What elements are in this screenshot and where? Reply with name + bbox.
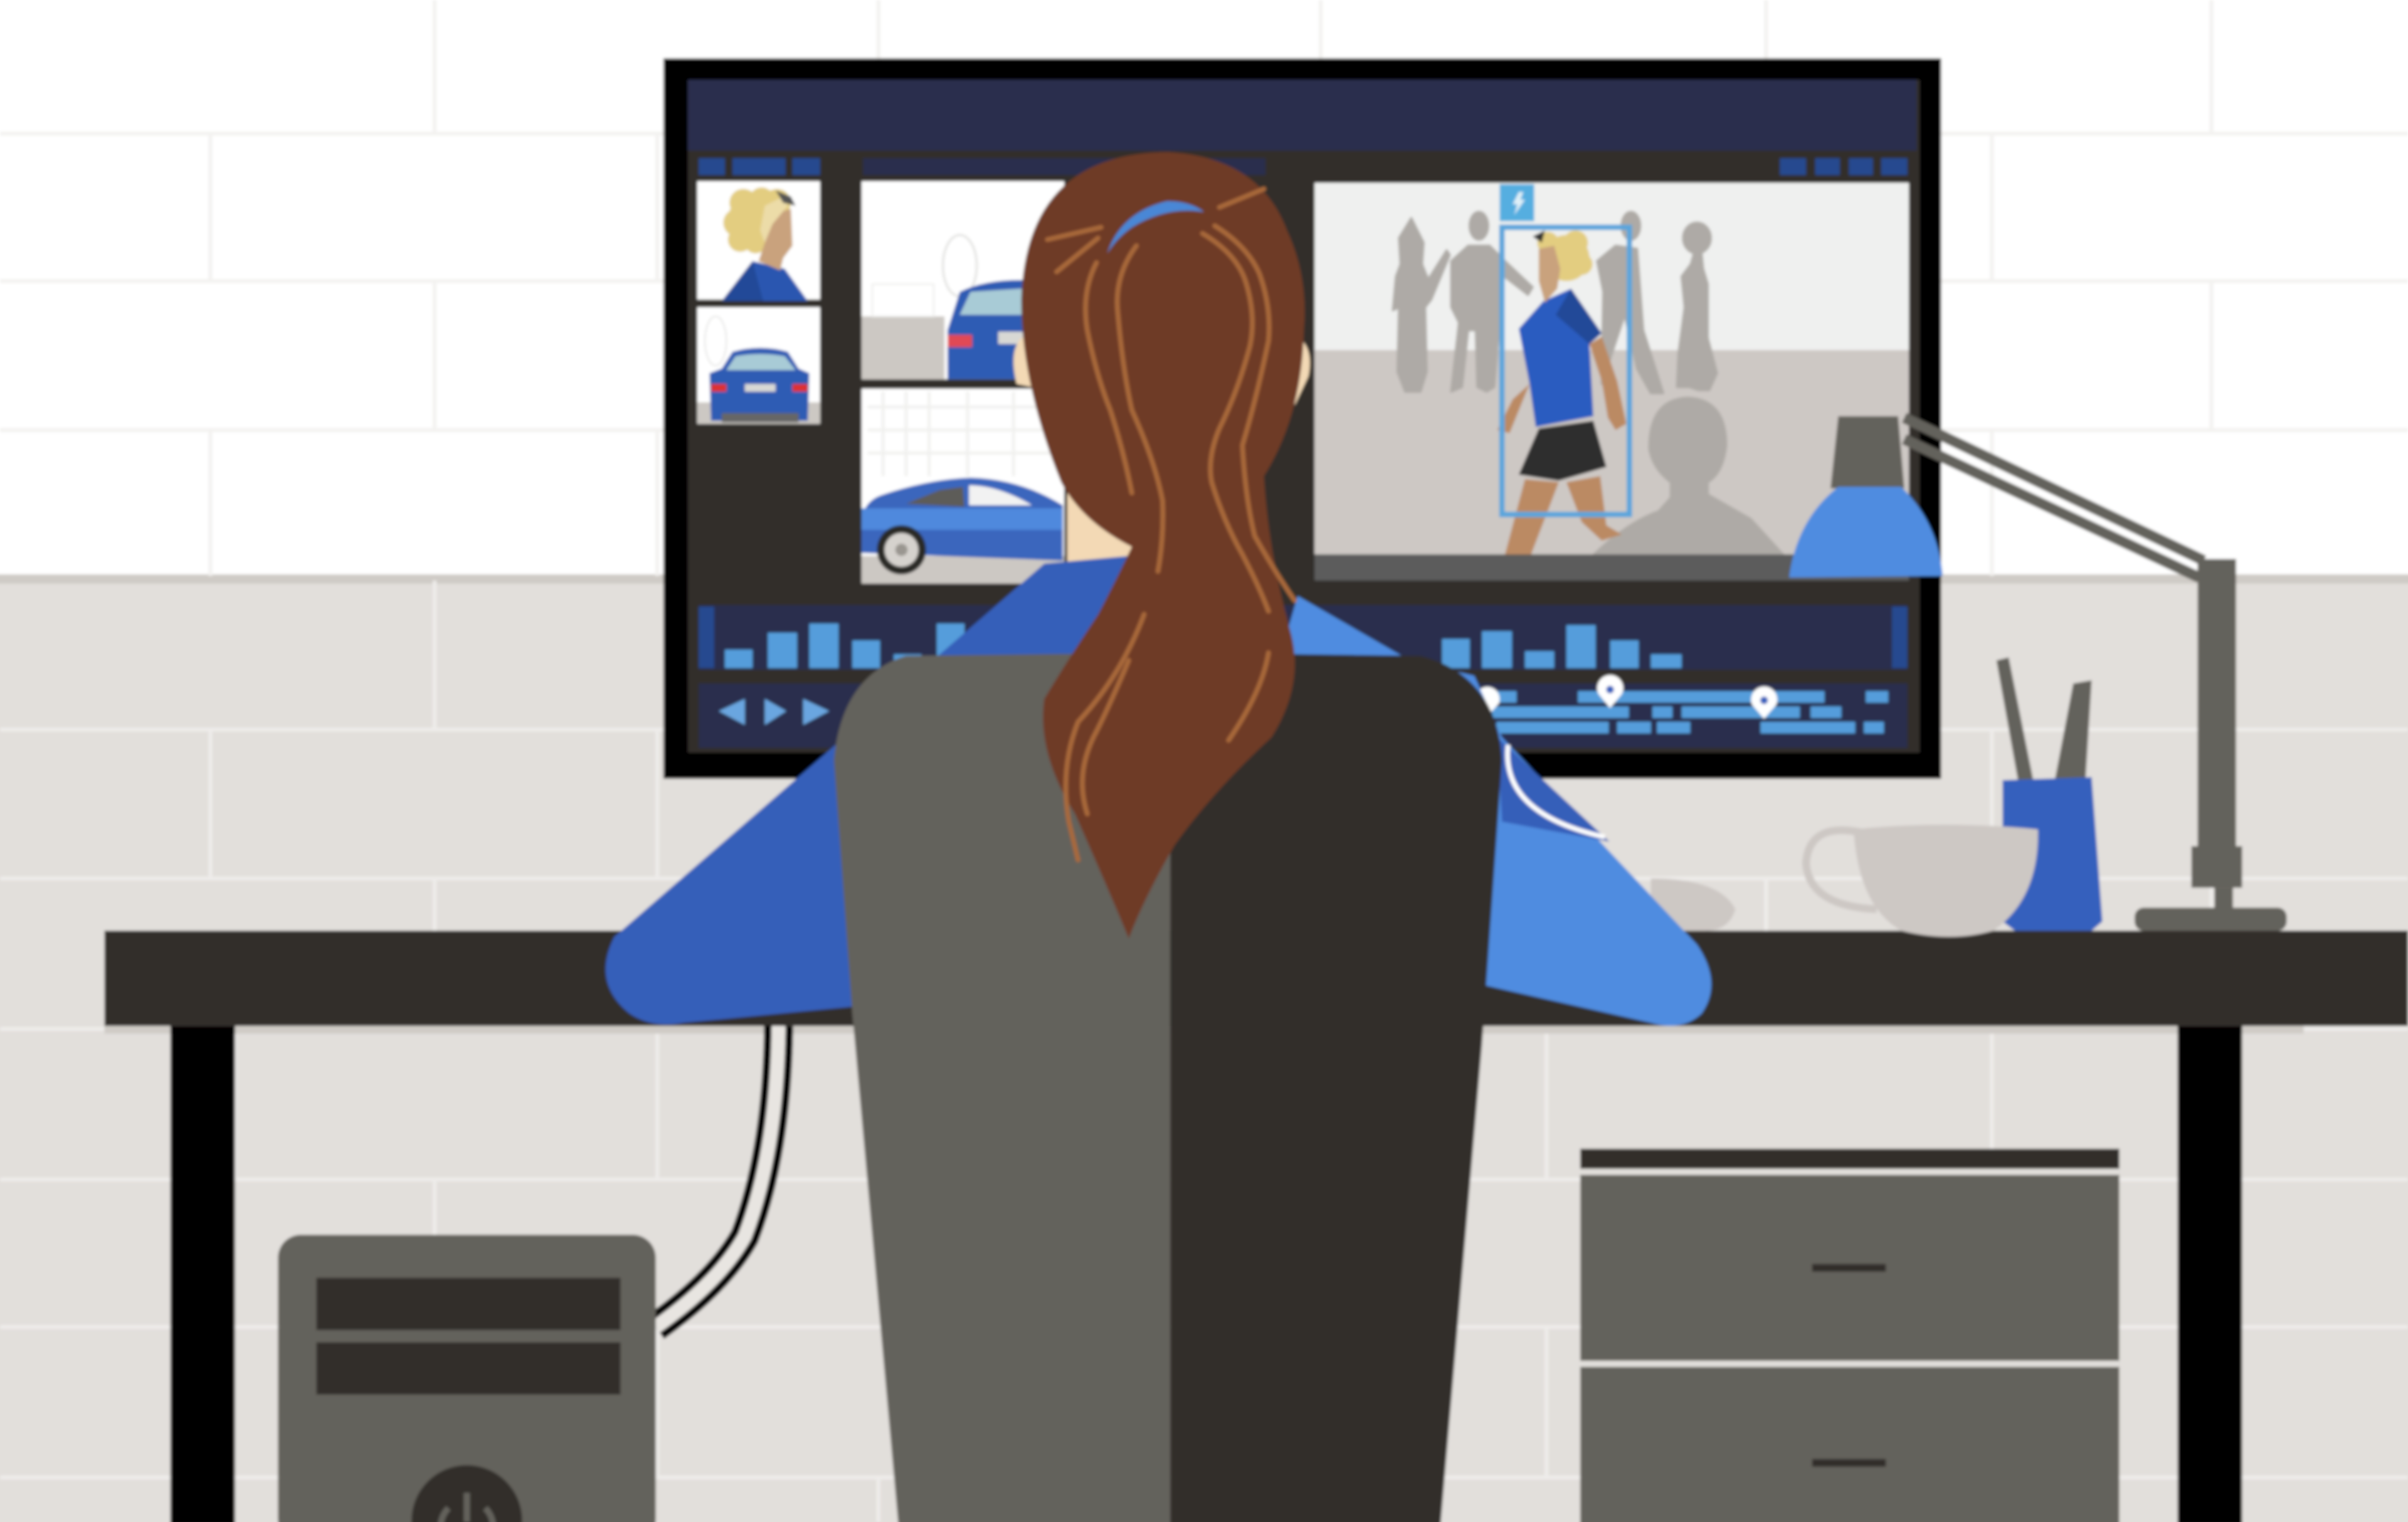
thumbnail: woman <box>697 181 820 301</box>
ears <box>1013 335 1310 406</box>
timeline band with playback controls <box>699 675 1908 748</box>
left panel tabs <box>699 158 820 175</box>
timeline clips <box>1474 691 1888 733</box>
lamp head <box>1830 416 1904 489</box>
office chair <box>834 653 1502 1522</box>
video frame: blue car side view <box>862 389 1064 584</box>
tracked woman figure <box>1497 230 1626 554</box>
left arm and shirt <box>606 556 1167 1025</box>
middle panel tab <box>863 158 1265 175</box>
hair and ponytail <box>1022 152 1304 938</box>
hair band <box>1107 201 1204 253</box>
foreground silhouette <box>1594 398 1783 554</box>
neck <box>1067 492 1136 562</box>
right arm and shirt <box>1275 596 1711 1026</box>
coffee cup with saucer <box>1651 825 2038 937</box>
background crowd silhouettes <box>1393 212 1783 554</box>
computer tower <box>278 1235 656 1522</box>
pen cup <box>1997 657 2103 931</box>
detection box and tag <box>1499 184 1629 514</box>
hair highlights <box>1047 189 1294 860</box>
monitor <box>663 58 1941 779</box>
cables <box>656 1026 779 1327</box>
drawer unit <box>1580 1149 2120 1522</box>
thumbnail: blue car rear <box>697 307 820 424</box>
video transport bar <box>1314 554 1909 581</box>
person <box>606 152 1711 1522</box>
shoulder sleeve with white trim <box>1497 737 1610 842</box>
playback controls <box>719 699 829 725</box>
power button <box>411 1465 522 1522</box>
lamp shade <box>1789 487 1943 578</box>
video frame: crowd with tracked person <box>1314 182 1909 554</box>
desk <box>105 931 2408 1522</box>
desk lamp <box>1789 416 2287 931</box>
right panel tabs <box>1780 158 1908 175</box>
top navigation bar <box>688 80 1916 151</box>
video frame: car in street <box>862 181 1064 379</box>
location pins <box>1475 675 1777 719</box>
audio waveform band <box>699 605 1908 670</box>
lamp post and base <box>2135 559 2287 931</box>
lamp arm <box>1904 418 2204 578</box>
